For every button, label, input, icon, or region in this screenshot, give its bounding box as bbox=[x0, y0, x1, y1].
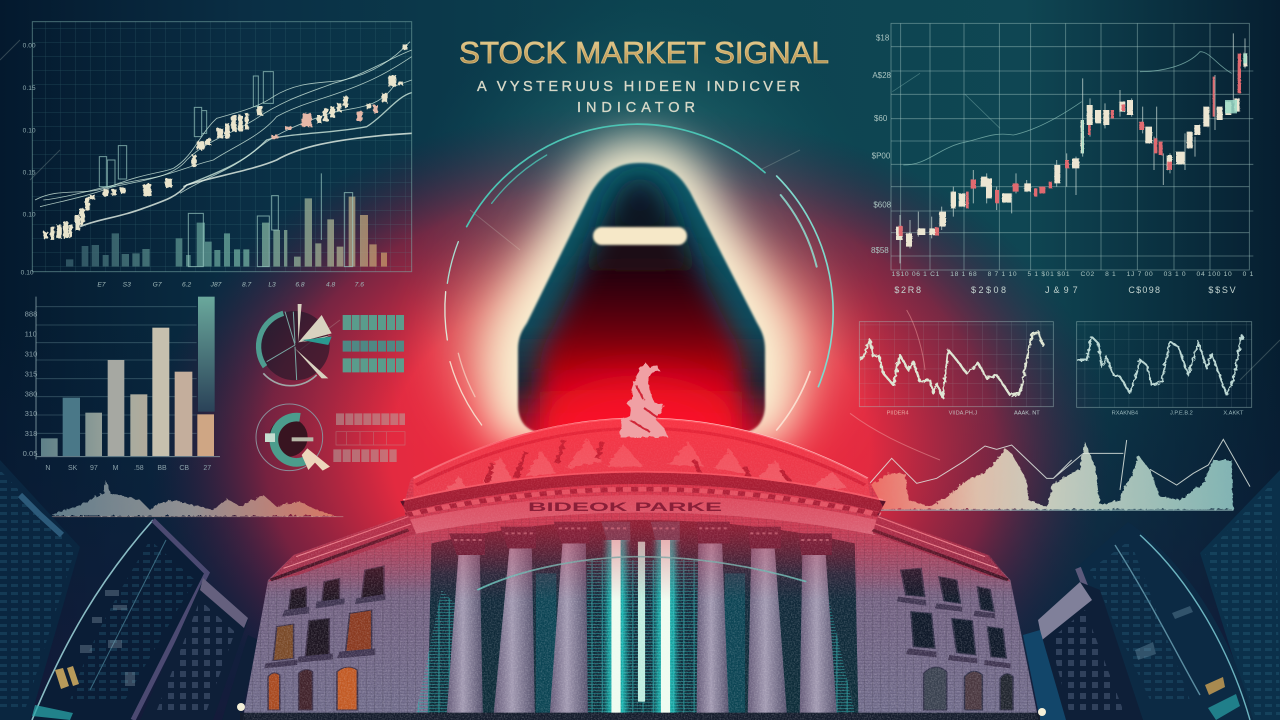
statue bbox=[620, 363, 668, 437]
chart: top-left trend and volume: 7.6 bbox=[355, 282, 364, 289]
chart: right small line chart right: X.AKKT bbox=[1223, 411, 1244, 417]
chart: left bar chart: 97 bbox=[90, 465, 98, 472]
column capitals bbox=[449, 522, 832, 555]
chart: right small line chart right bbox=[1077, 322, 1252, 417]
chart: top-left trend and volume: 8.7 bbox=[242, 282, 252, 289]
frieze band bbox=[408, 495, 878, 535]
chart: right small line chart right: J.P.E.B.2 bbox=[1170, 411, 1193, 417]
stone texture bbox=[240, 410, 1040, 720]
street lamps bbox=[237, 703, 1046, 716]
chart: left bar chart: BB bbox=[157, 465, 167, 472]
chart: top-left trend and volume: 4.8 bbox=[326, 282, 336, 289]
chart: left bar chart: 380 bbox=[25, 390, 37, 399]
chart: top-right candlesticks: $608 bbox=[873, 200, 892, 209]
side eaves bbox=[268, 515, 1010, 582]
subtitle bbox=[477, 79, 800, 116]
chart: left bar chart bbox=[23, 297, 220, 472]
skyline: left towers bbox=[0, 460, 258, 720]
dome slot bbox=[593, 227, 687, 245]
faded mini bars bbox=[333, 413, 405, 462]
subtitle: INDICATOR bbox=[577, 100, 695, 116]
icon: ring gauge with pointer bbox=[256, 404, 330, 471]
chart: right small line chart right: RXAKNB4 bbox=[1112, 411, 1138, 417]
chart: top-right candlesticks: 1$10 06 1 C1 18 1 68 8 7 1 10 5 1 $01 $01 C02 8 1 1J 7 00 03 1 0 04 100 10 0 1 bbox=[892, 271, 1254, 278]
chart: top-left trend and volume: 6.8 bbox=[295, 282, 305, 289]
title bbox=[459, 35, 829, 116]
chart: top-left trend and volume: 0.00 bbox=[23, 42, 36, 49]
chart: top-right candlesticks: 8$58 bbox=[871, 246, 889, 255]
chart: top-left trend and volume: 0.15 bbox=[23, 85, 36, 92]
chart: top-right candlesticks: $2R8 bbox=[894, 285, 921, 295]
chart: top-left trend and volume: 0.10 bbox=[21, 270, 34, 277]
chart: top-left trend and volume: 0.10 bbox=[23, 127, 36, 134]
chart: left bar chart: 0.05 bbox=[23, 449, 38, 458]
stock exchange building bbox=[237, 363, 1046, 720]
hidden indicator dome bbox=[516, 161, 767, 432]
chart: top-right candlesticks: A$28 bbox=[872, 71, 892, 80]
skyline: right towers bbox=[1023, 470, 1280, 720]
chart: right small line chart left: VIIDA.PH.J bbox=[949, 411, 977, 417]
chart: top-left trend and volume bbox=[21, 22, 412, 289]
chart: top-left trend and volume: 0.10 bbox=[23, 212, 36, 219]
light beams bbox=[606, 540, 676, 717]
chart: top-right candlesticks: $P00 bbox=[872, 151, 891, 160]
gauges and mini bars bbox=[256, 304, 405, 471]
chart: top-right candlesticks: C$098 bbox=[1128, 285, 1160, 295]
chart: left bar chart: 315 bbox=[25, 370, 37, 379]
chart: top-left trend and volume: 6.2 bbox=[182, 282, 192, 289]
building walls bbox=[243, 418, 1038, 720]
pediment relief bbox=[413, 418, 870, 497]
chart: top-left trend and volume: L3 bbox=[268, 282, 276, 289]
chart: left bar chart: 310 bbox=[25, 350, 37, 359]
windows left bbox=[268, 566, 384, 710]
subtitle: A VYSTERUUS HIDEEN INDICVER bbox=[477, 79, 800, 95]
building inscription: BIDEOK PARKE bbox=[528, 500, 722, 514]
chart: left bar chart: 27 bbox=[203, 465, 211, 472]
chart: left bar chart: SK bbox=[68, 465, 78, 472]
building base bbox=[240, 713, 1040, 720]
chart: left bar chart: N bbox=[45, 465, 50, 472]
chart: right area chart bbox=[850, 310, 1250, 511]
chart: left bar chart: CB bbox=[179, 465, 189, 472]
chart: top-left trend and volume: S3 bbox=[123, 282, 131, 289]
chart: right small line chart left: AAAK. NT bbox=[1014, 411, 1040, 417]
chart: right small line chart left bbox=[859, 322, 1053, 417]
halo glow bbox=[455, 140, 825, 470]
chart: top-left trend and volume: J87 bbox=[210, 282, 222, 289]
columns bbox=[447, 543, 837, 715]
chart: left bar chart: M bbox=[113, 465, 119, 472]
icon: pie gauge bbox=[259, 304, 332, 386]
teal grid panels bbox=[416, 560, 855, 713]
ring arcs bbox=[445, 124, 833, 430]
windows right bbox=[901, 568, 1013, 710]
chart: left bar chart: 318 bbox=[25, 429, 37, 438]
chart: left bottom area bbox=[50, 480, 343, 517]
window sills bbox=[264, 594, 1010, 668]
chart: top-right candlesticks: $$SV bbox=[1208, 285, 1236, 295]
title: STOCK MARKET SIGNAL bbox=[459, 35, 829, 70]
mini bars bbox=[343, 315, 404, 372]
chart: left bar chart: 888 bbox=[25, 310, 37, 319]
chart: top-right candlesticks: $18 bbox=[876, 34, 890, 43]
chart: top-left trend and volume: G7 bbox=[153, 282, 162, 289]
energy arc bbox=[477, 557, 806, 590]
chart: left bar chart: .58 bbox=[134, 465, 144, 472]
chart: top-right candlesticks bbox=[871, 23, 1254, 295]
red light overlay bbox=[268, 418, 1010, 594]
chart: right small line chart left: PIIDER4 bbox=[887, 411, 909, 417]
chart: top-right candlesticks: $60 bbox=[874, 114, 888, 123]
chart: top-left trend and volume: E7 bbox=[97, 282, 106, 289]
cornice with dentils bbox=[403, 472, 883, 515]
chart: top-right candlesticks: $2$08 bbox=[971, 285, 1006, 295]
chart: left bar chart: 110 bbox=[25, 330, 37, 339]
colonnade recess bbox=[428, 520, 858, 713]
chart: left bar chart: 310 bbox=[25, 409, 37, 418]
chart: top-left trend and volume: 0.15 bbox=[23, 169, 36, 176]
chart: top-right candlesticks: J&97 bbox=[1045, 285, 1078, 295]
